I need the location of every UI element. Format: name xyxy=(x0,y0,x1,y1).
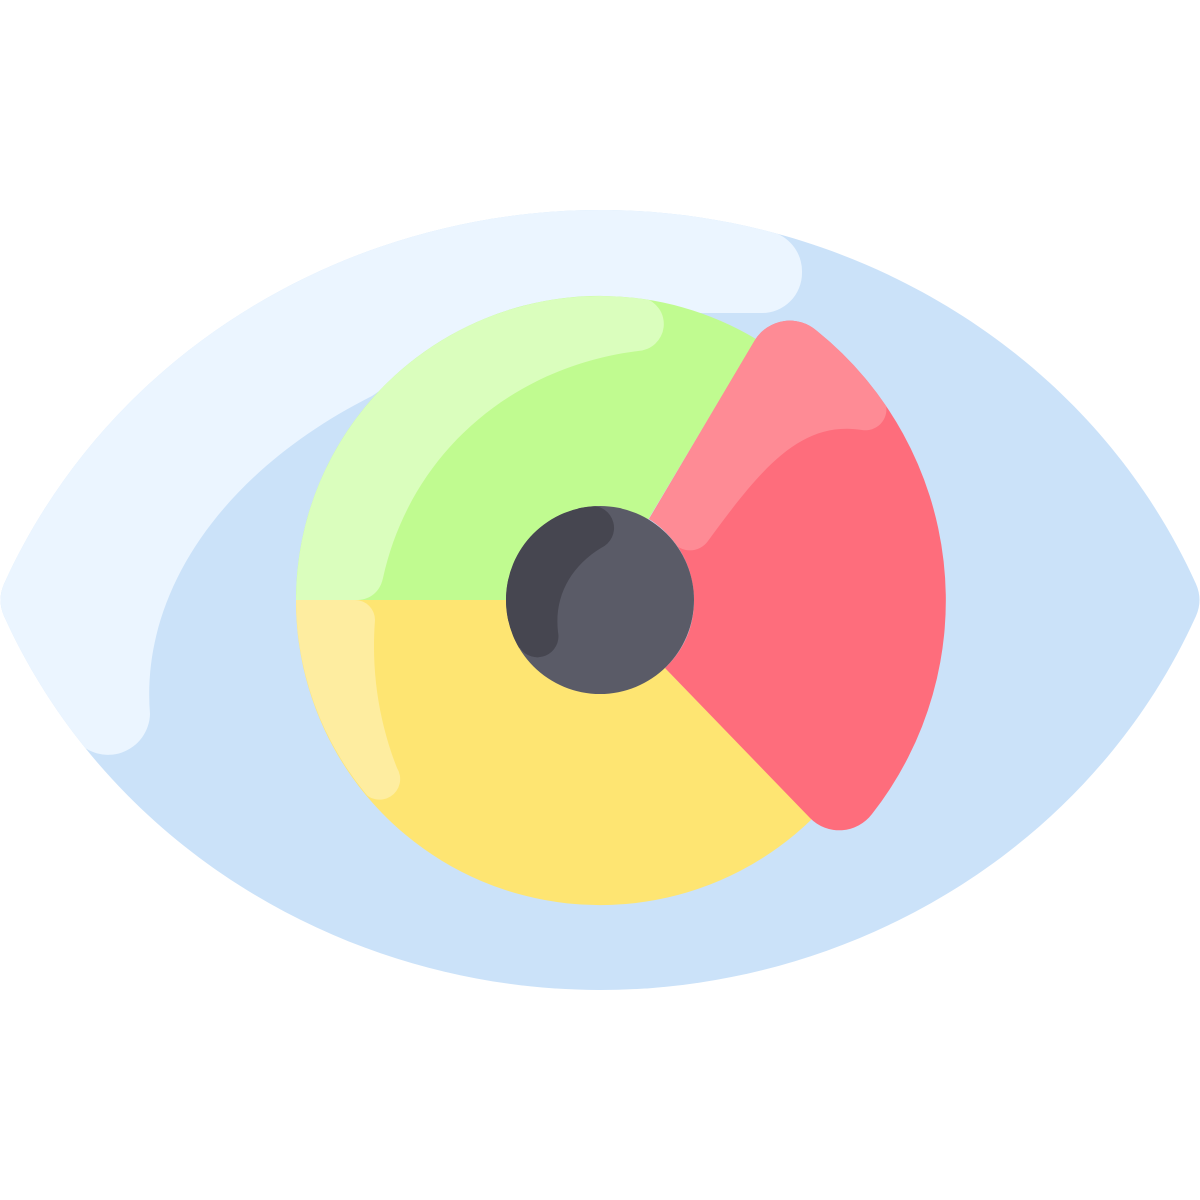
iris: yellow segment xyxy=(296,600,812,905)
pupil highlight xyxy=(506,506,614,658)
eye upper-left highlight xyxy=(0,190,802,755)
iris: green highlight xyxy=(280,280,664,600)
pupil xyxy=(506,506,694,694)
iris: yellow highlight xyxy=(296,600,400,800)
iris: green segment xyxy=(296,296,756,600)
icon: eye with colour wheel iris xyxy=(0,210,1200,990)
eye outline shape xyxy=(0,210,1200,990)
iris: red segment xyxy=(649,321,946,830)
iris: red highlight xyxy=(649,320,886,550)
